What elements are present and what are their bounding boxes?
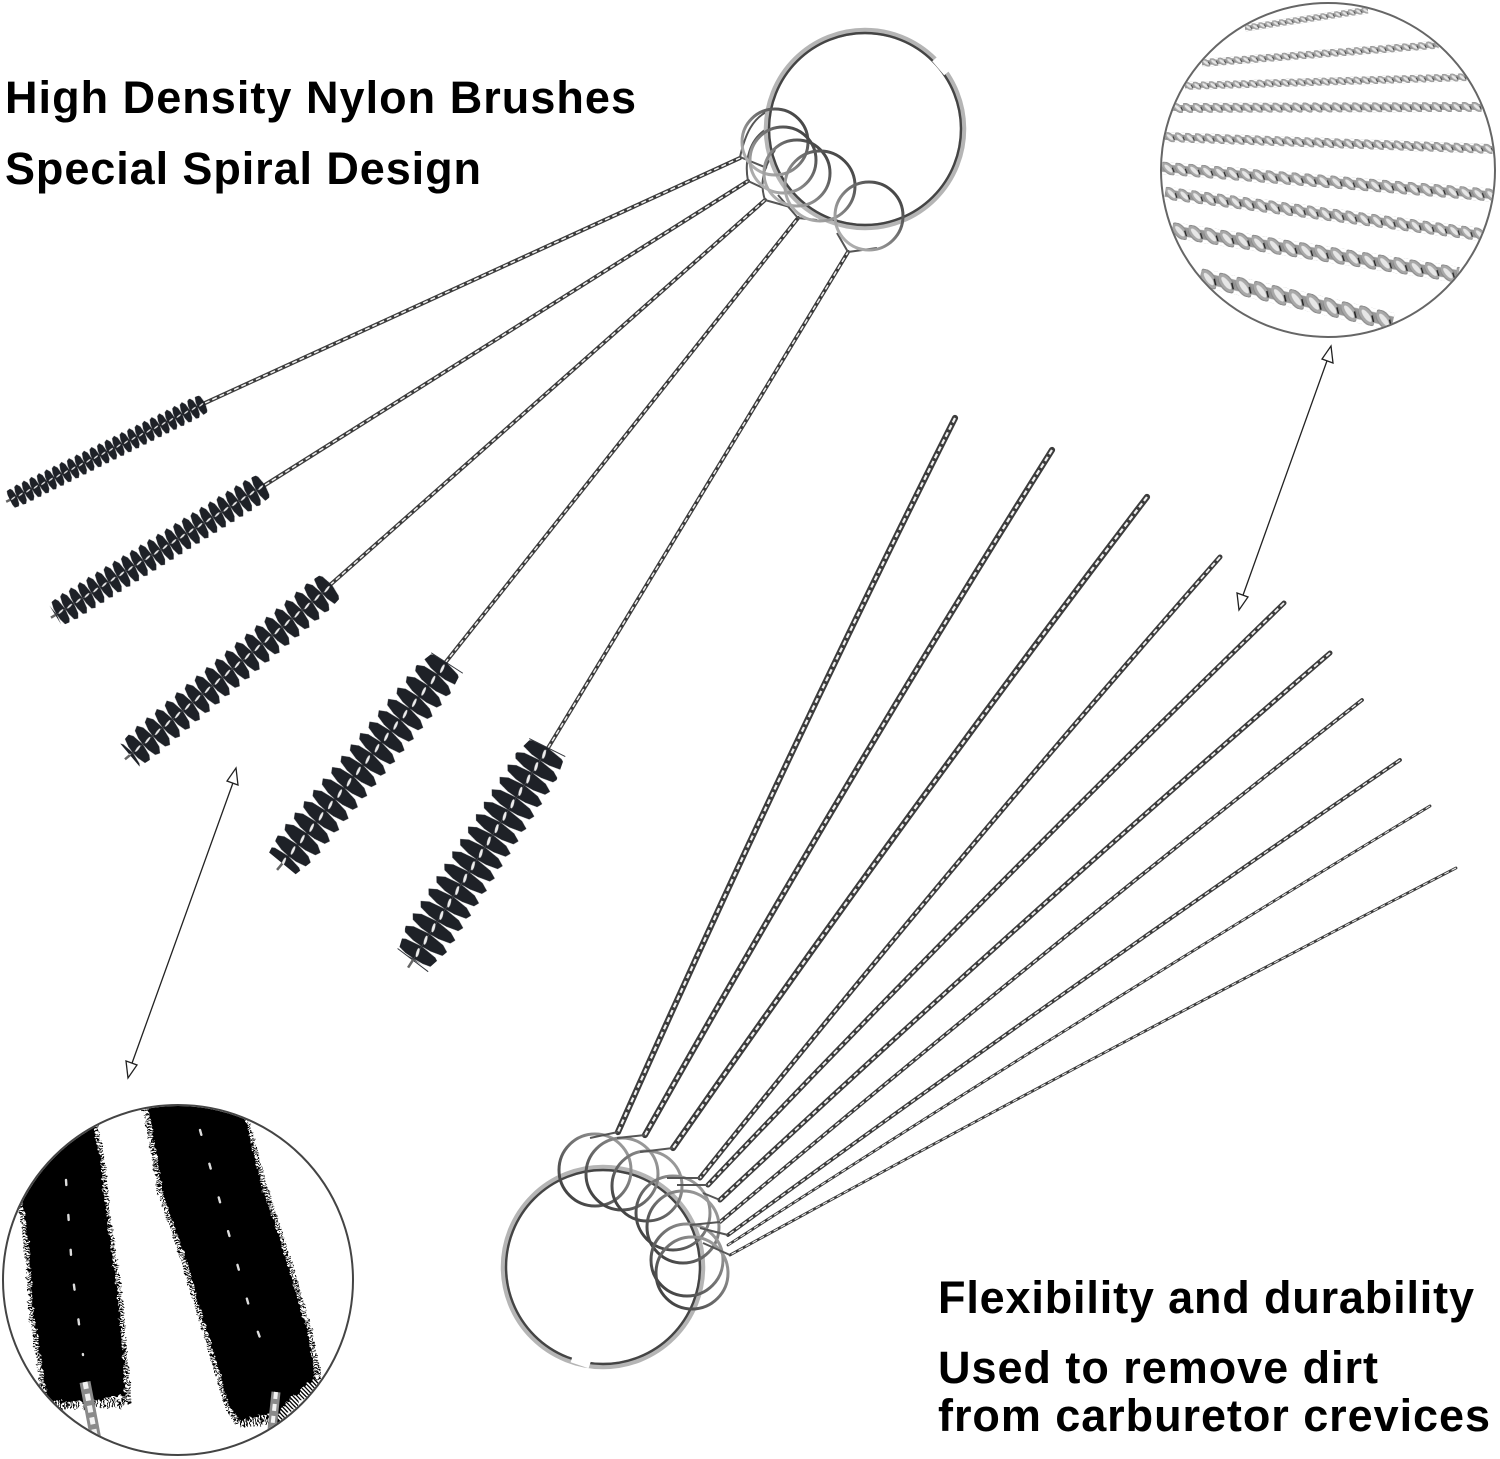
heading: needle features: Flexibility and durability [938, 1272, 1474, 1323]
brush set on key rings [1, 31, 963, 982]
heading: brush features [5, 72, 636, 194]
heading: needle features: Used to remove dirt [938, 1342, 1378, 1393]
brush 5 [386, 732, 571, 982]
arrow: needle to magnified view [1237, 346, 1333, 610]
heading: needle features: from carburetor crevices [938, 1390, 1490, 1441]
needle key rings [504, 1132, 730, 1366]
magnified circle: brush bristles [0, 1100, 353, 1455]
cleaning needle set on key rings [504, 418, 1456, 1366]
magnified circle: twisted wires [1161, 3, 1495, 337]
brush 4 [259, 647, 466, 885]
heading: brush features: High Density Nylon Brushes [5, 72, 636, 123]
wire handles [205, 110, 877, 748]
key rings [742, 31, 963, 250]
heading: needle features [938, 1272, 1490, 1441]
heading: brush features: Special Spiral Design [5, 143, 481, 194]
brush 2 [43, 472, 273, 631]
brush 1 [1, 393, 210, 512]
arrow: brush to magnified view [126, 768, 238, 1078]
brush 3 [113, 571, 344, 774]
needles [618, 418, 1456, 1255]
